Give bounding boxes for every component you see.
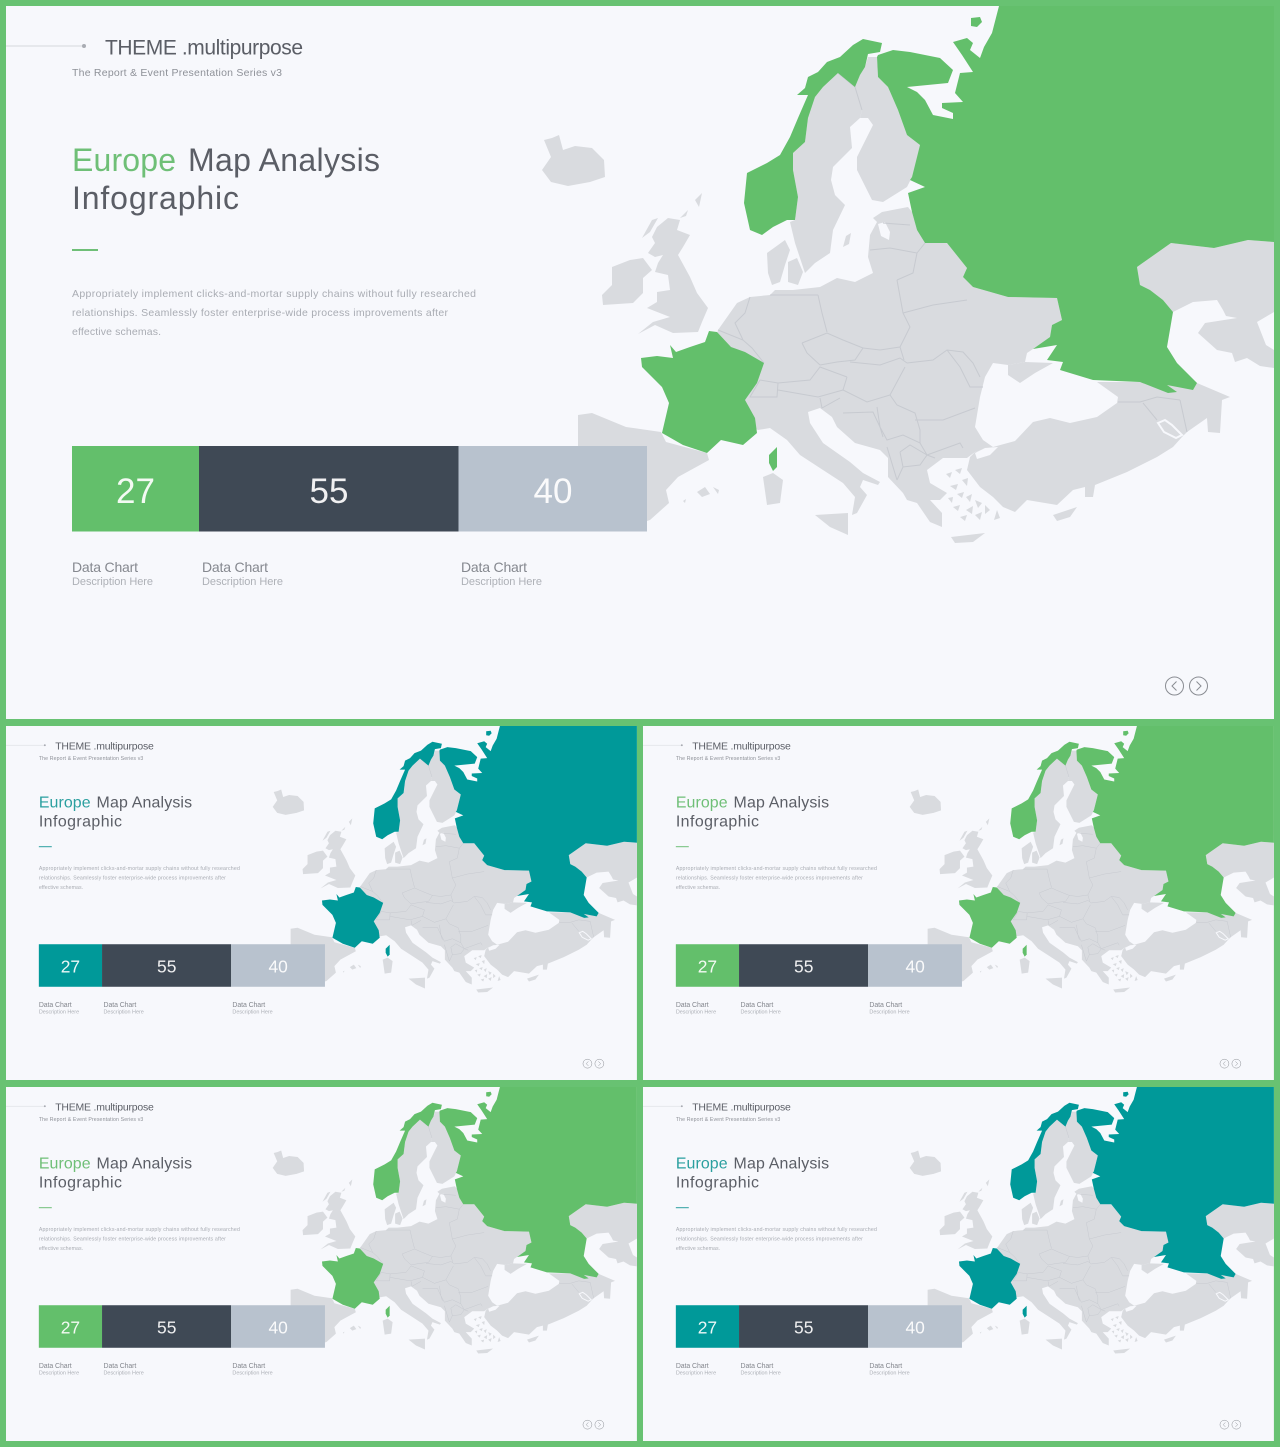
description: Appropriately implement clicks-and-mortar supply chains without fully researched [39, 1227, 240, 1233]
title [39, 1155, 192, 1191]
title [676, 1155, 829, 1191]
description: relationships. Seamlessly foster enterprise-wide process improvements after [676, 1237, 863, 1243]
bar labels: Data Chart [676, 1002, 709, 1009]
bar labels [39, 1002, 273, 1015]
bar labels: Data Chart [741, 1363, 773, 1370]
navigation arrows [1220, 1420, 1241, 1429]
title: Infographic [39, 1174, 122, 1191]
panel: main slide [6, 6, 1274, 719]
bar chart: 55 [794, 957, 813, 977]
header: THEME .multipurpose [692, 741, 791, 752]
title: Europe [39, 794, 91, 811]
bar chart [72, 446, 647, 532]
header: The Report & Event Presentation Series v3 [72, 67, 282, 79]
bar chart: 27 [61, 957, 80, 977]
navigation arrows [1220, 1059, 1241, 1068]
bar labels: Description Here [741, 1370, 781, 1376]
bar labels: Data Chart [461, 559, 527, 575]
panel: small slide bottom left, green [6, 1086, 637, 1441]
bar labels [72, 562, 542, 588]
bar labels: Data Chart [72, 559, 138, 575]
title: Europe [39, 1155, 91, 1172]
title: Europe [676, 1155, 728, 1172]
description: relationships. Seamlessly foster enterprise-wide process improvements after [39, 1237, 226, 1243]
bar labels: Data Chart [39, 1363, 72, 1370]
header [643, 741, 791, 762]
map: Europe, green highlights [273, 1086, 637, 1353]
bar chart: 27 [61, 1318, 80, 1338]
bar labels: Description Here [232, 1370, 273, 1376]
description: effective schemas. [39, 1246, 83, 1252]
description: relationships. Seamlessly foster enterprise-wide process improvements after [72, 307, 448, 319]
map: Europe, teal highlights [910, 1086, 1274, 1353]
bar labels: Data Chart [104, 1002, 136, 1009]
bar labels: Description Here [232, 1009, 273, 1015]
bar chart: 55 [794, 1318, 813, 1338]
bar chart: 27 [698, 1318, 717, 1338]
description: Appropriately implement clicks-and-mortar supply chains without fully researched [72, 288, 476, 300]
bar labels [676, 1002, 910, 1015]
description: relationships. Seamlessly foster enterprise-wide process improvements after [39, 876, 226, 882]
bar labels: Data Chart [869, 1002, 902, 1009]
description: effective schemas. [676, 885, 720, 891]
bar labels: Description Here [72, 576, 153, 588]
bar chart: 40 [905, 1318, 925, 1338]
bar labels [676, 1363, 910, 1376]
title: Map Analysis [188, 142, 380, 178]
description: effective schemas. [39, 885, 83, 891]
bar labels: Description Here [39, 1370, 79, 1376]
bar labels: Data Chart [104, 1363, 136, 1370]
bar chart: 40 [268, 1318, 288, 1338]
title: Map Analysis [97, 1155, 192, 1172]
header: THEME .multipurpose [692, 1102, 791, 1113]
bar chart: 40 [268, 957, 288, 977]
panel: small slide top right, green [643, 725, 1274, 1080]
bar labels: Description Here [676, 1370, 716, 1376]
bar chart: 27 [698, 957, 717, 977]
header: THEME .multipurpose [55, 1102, 154, 1113]
title [72, 142, 380, 216]
header: THEME .multipurpose [55, 741, 154, 752]
panel: small slide top left, teal [6, 725, 637, 1080]
bar labels: Description Here [869, 1009, 910, 1015]
bar labels: Description Here [461, 576, 542, 588]
bar labels: Description Here [39, 1009, 79, 1015]
bar labels: Description Here [676, 1009, 716, 1015]
bar chart: 40 [534, 472, 572, 511]
bar labels: Data Chart [202, 559, 268, 575]
map: Europe, green highlights [910, 725, 1274, 992]
description [39, 866, 240, 891]
bar labels: Data Chart [232, 1363, 265, 1370]
accent rule [72, 249, 98, 251]
title [39, 794, 192, 830]
bar labels: Description Here [104, 1009, 144, 1015]
title: Map Analysis [734, 1155, 829, 1172]
bar chart: 40 [905, 957, 925, 977]
header [643, 1102, 791, 1123]
title: Map Analysis [97, 794, 192, 811]
description: Appropriately implement clicks-and-mortar supply chains without fully researched [39, 866, 240, 872]
title [676, 794, 829, 830]
bar chart [39, 1305, 325, 1348]
title: Infographic [39, 813, 122, 830]
accent rule [676, 1206, 689, 1209]
description: Appropriately implement clicks-and-mortar supply chains without fully researched [676, 1227, 877, 1233]
accent rule [676, 846, 689, 848]
accent rule [38, 1207, 52, 1208]
map: Europe, teal highlights [273, 725, 637, 992]
bar chart: 55 [310, 472, 348, 511]
description [676, 1227, 877, 1252]
panel: small slide bottom right, teal [643, 1086, 1274, 1441]
bar labels: Description Here [104, 1370, 144, 1376]
title: Map Analysis [734, 794, 829, 811]
bar chart [39, 944, 325, 987]
header: THEME .multipurpose [105, 36, 303, 60]
header: The Report & Event Presentation Series v3 [39, 1117, 143, 1123]
header [6, 741, 154, 762]
description: effective schemas. [676, 1246, 720, 1252]
description [39, 1227, 240, 1252]
navigation arrows [1166, 677, 1208, 695]
bar chart [676, 1305, 962, 1348]
bar chart: 27 [116, 472, 155, 511]
bar chart [676, 944, 962, 987]
title: Europe [72, 142, 176, 178]
title: Europe [676, 794, 728, 811]
bar labels: Data Chart [39, 1002, 72, 1009]
bar labels [39, 1363, 273, 1376]
bar labels: Description Here [869, 1370, 910, 1376]
description [676, 866, 877, 891]
bar labels: Data Chart [741, 1002, 773, 1009]
bar chart: 55 [157, 957, 176, 977]
bar labels: Description Here [741, 1009, 781, 1015]
title: Infographic [676, 1174, 759, 1191]
bar labels: Data Chart [232, 1002, 265, 1009]
header: The Report & Event Presentation Series v3 [676, 1117, 780, 1123]
header [6, 1102, 154, 1123]
description: Appropriately implement clicks-and-mortar supply chains without fully researched [676, 866, 877, 872]
header: The Report & Event Presentation Series v3 [676, 756, 780, 762]
bar chart: 55 [157, 1318, 176, 1338]
bar labels: Description Here [202, 576, 283, 588]
title: Infographic [72, 180, 239, 216]
navigation arrows [583, 1420, 604, 1429]
navigation arrows [583, 1059, 604, 1068]
bar labels: Data Chart [869, 1363, 902, 1370]
description: effective schemas. [72, 326, 161, 338]
description [72, 288, 476, 338]
header [6, 36, 303, 79]
bar labels: Data Chart [676, 1363, 709, 1370]
map: Europe, green highlights [542, 6, 1274, 543]
title: Infographic [676, 813, 759, 830]
description: relationships. Seamlessly foster enterprise-wide process improvements after [676, 876, 863, 882]
header: The Report & Event Presentation Series v3 [39, 756, 143, 762]
accent rule [38, 846, 52, 848]
